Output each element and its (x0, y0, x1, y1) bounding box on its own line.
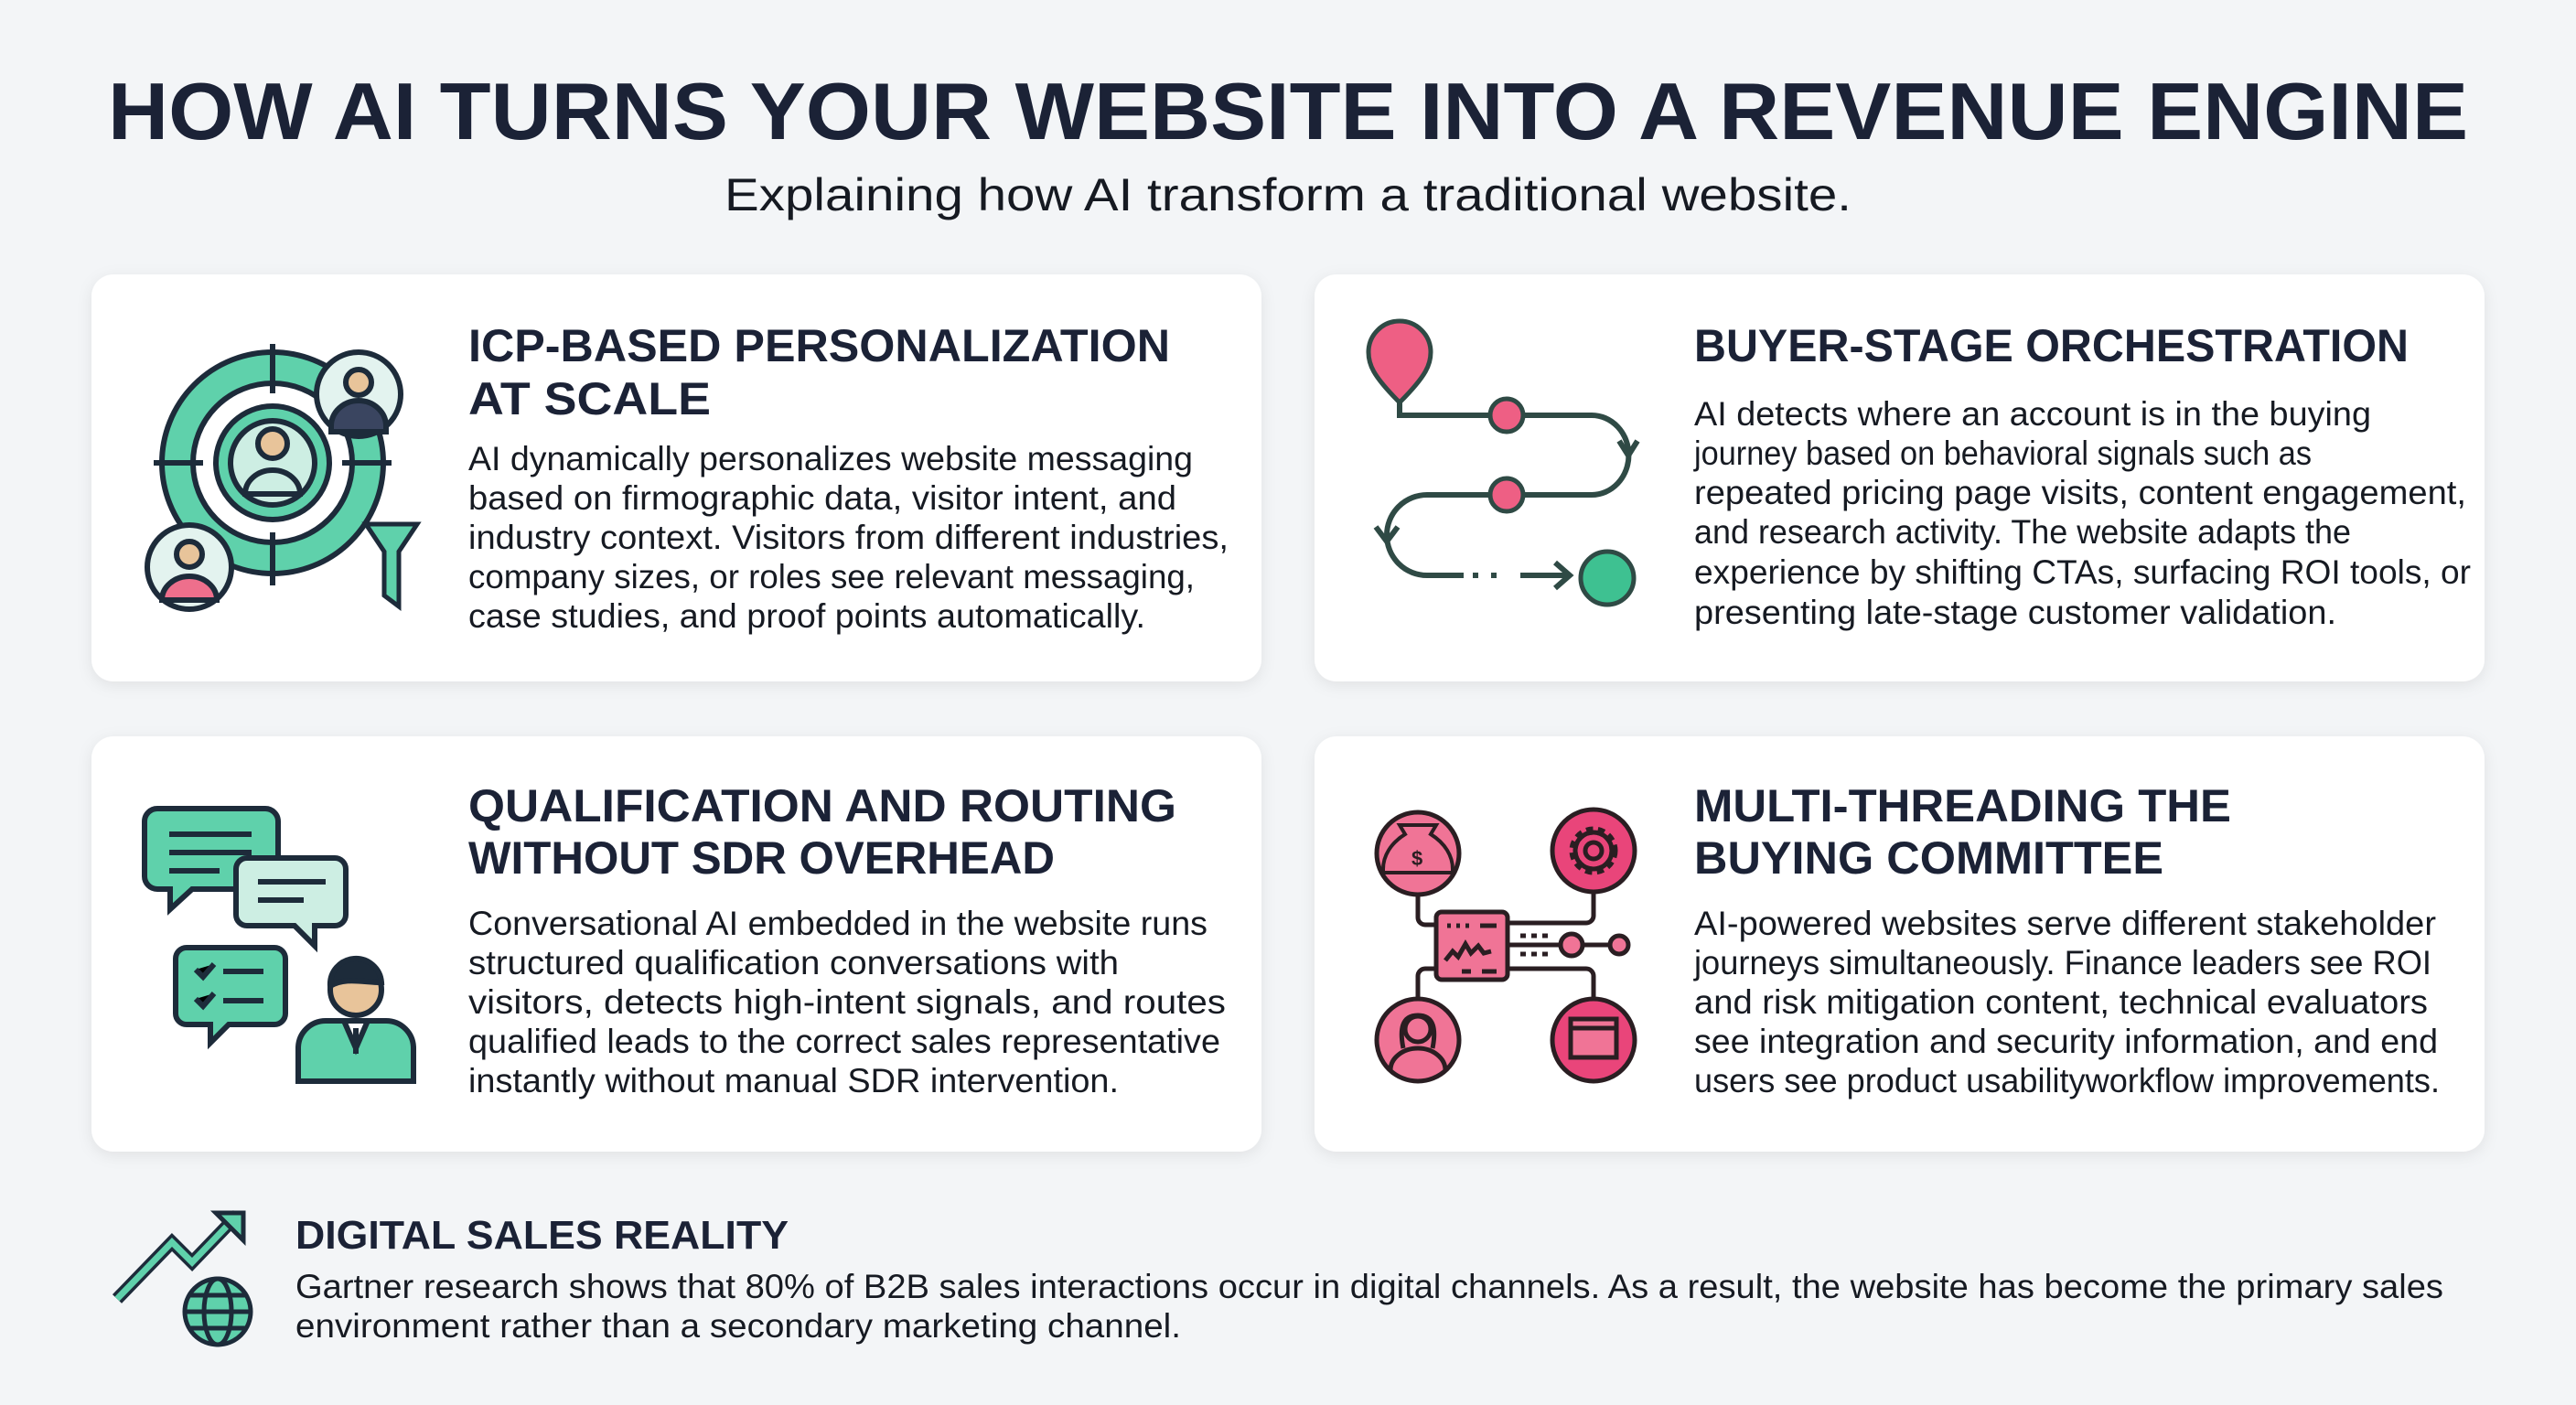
body text: Gartner research shows that 80% of B2B sales interactions occur in digital channels. As a result, the website has become the primary sales (295, 1268, 2443, 1305)
panel: buyer-stage orchestration (1315, 274, 2485, 681)
heading: BUYING COMMITTEE (1694, 832, 2163, 884)
body text: repeated pricing page visits, content engagement, (1694, 474, 2466, 511)
heading: BUYER-STAGE ORCHESTRATION (1694, 320, 2409, 371)
heading: WITHOUT SDR OVERHEAD (468, 832, 1055, 884)
body text: industry context. Visitors from different industries, (468, 519, 1229, 556)
body text: qualified leads to the correct sales representative (468, 1023, 1220, 1060)
footer: digital sales reality (117, 1213, 2443, 1345)
icon: stakeholder network (1377, 810, 1635, 1081)
title: HOW AI TURNS YOUR WEBSITE INTO A REVENUE ENGINE (108, 66, 2468, 156)
body text: AI-powered websites serve different stakeholder (1694, 905, 2436, 942)
body text: and risk mitigation content, technical evaluators (1694, 983, 2428, 1021)
body text: based on firmographic data, visitor intent, and (468, 479, 1176, 517)
body text: case studies, and proof points automatically. (468, 597, 1145, 635)
body text (468, 440, 1229, 635)
body text: journeys simultaneously. Finance leaders see ROI (1693, 944, 2431, 981)
icon: growth arrow and globe (117, 1213, 251, 1345)
subtitle: Explaining how AI transform a traditional website. (724, 169, 1852, 220)
body text: AI dynamically personalizes website messaging (468, 440, 1193, 477)
body text: environment rather than a secondary marketing channel. (295, 1307, 1181, 1345)
icon: target with personas (147, 344, 417, 609)
body text (295, 1268, 2443, 1345)
heading: MULTI-THREADING THE (1694, 780, 2231, 831)
icon: journey path (1368, 321, 1637, 605)
body text (1693, 905, 2440, 1099)
heading: ICP-BASED PERSONALIZATION (468, 320, 1170, 371)
body text (468, 905, 1226, 1099)
body text: company sizes, or roles see relevant messaging, (468, 558, 1195, 595)
heading: DIGITAL SALES REALITY (295, 1213, 789, 1258)
body text: journey based on behavioral signals such as (1693, 434, 2312, 472)
heading (468, 780, 1176, 884)
panel: qualification and routing (91, 736, 1261, 1152)
body text: AI detects where an account is in the buying (1694, 395, 2371, 433)
body text: presenting late-stage customer validation. (1694, 594, 2336, 631)
heading: QUALIFICATION AND ROUTING (468, 780, 1176, 831)
body text: Conversational AI embedded in the website runs (468, 905, 1208, 942)
heading (468, 320, 1170, 424)
body text: instantly without manual SDR intervention. (468, 1062, 1119, 1099)
body text: users see product usabilityworkflow improvements. (1694, 1062, 2440, 1099)
heading (1694, 780, 2231, 884)
body text: structured qualification conversations with (468, 944, 1119, 981)
body text: and research activity. The website adapts the (1694, 513, 2351, 551)
icon: chat bubbles and rep (145, 809, 413, 1081)
body text: see integration and security information, and end (1694, 1023, 2438, 1060)
body text: experience by shifting CTAs, surfacing ROI tools, or (1694, 553, 2471, 591)
icon: stakeholder network: $ (1411, 847, 1422, 870)
heading: AT SCALE (468, 373, 711, 424)
panel: multi-threading the buying committee (1315, 736, 2485, 1152)
panel: ICP-based personalization (91, 274, 1261, 681)
body text: visitors, detects high-intent signals, and routes (468, 983, 1226, 1021)
body text (1693, 395, 2471, 631)
